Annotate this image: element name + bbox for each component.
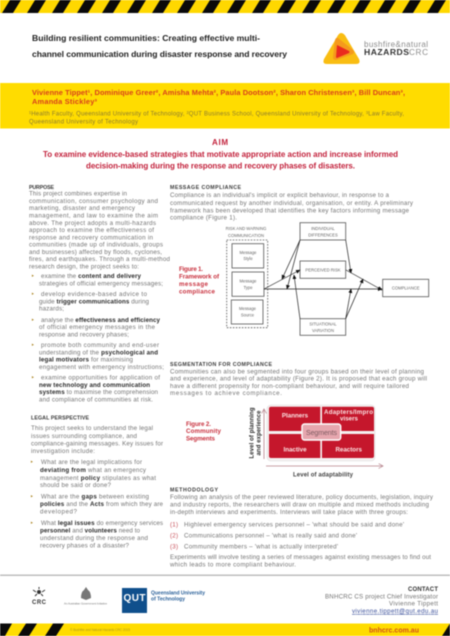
segmentation text: Communities can also be segmented into four groups based on their level of planning xyxy=(170,368,425,376)
purpose body text: approach to examine the effectiveness of xyxy=(29,227,154,234)
purpose body text: above. The project adopts a multi-hazards xyxy=(29,220,156,227)
aim: To examine evidence-based strategies that motivate appropriate action and increase informed xyxy=(43,150,398,159)
segment: inactive: Inactive xyxy=(283,446,307,454)
purpose bullet list xyxy=(31,273,164,404)
figure 1 caption: message xyxy=(179,281,209,288)
purpose bullet list: ‣ xyxy=(31,318,35,324)
vertical axis arrow xyxy=(263,409,265,459)
numbered groups: Communications personnel – 'what is really said and done' xyxy=(184,532,357,540)
copyright note: © Bushfire and Natural Hazards CRC 2015 xyxy=(70,628,130,632)
methodology text: Following an analysis of the peer reviewed literature, policy documents, legislation, inquiry xyxy=(170,494,434,501)
legal bullet list: understand during the response and xyxy=(40,535,149,542)
title: channel communication during disaster response and recovery xyxy=(32,49,287,59)
website: bnhcrc.com.au xyxy=(369,628,419,634)
segmentation text: have a different propensity for non-compliant behaviour, and will require tailored xyxy=(170,383,410,390)
aim xyxy=(43,138,398,170)
purpose bullet list: examine the content and delivery xyxy=(41,273,142,280)
heading: message compliance: MESSAGE COMPLIANCE xyxy=(170,185,241,191)
legal body text: investigation include: xyxy=(31,448,95,455)
author band: Amanda Stickley³ xyxy=(32,97,98,106)
risk and warning communication group: Message xyxy=(240,278,257,284)
segmentation text xyxy=(170,368,427,397)
logo: QUT xyxy=(122,588,205,613)
legal bullet list: ‣ xyxy=(30,460,34,466)
message compliance text: Compliance is an individual's implicit or explicit behaviour, in response to a xyxy=(170,192,390,199)
logo: Bushfire and Natural Hazards CRC xyxy=(323,33,428,64)
legal body text: This project seeks to understand the legal xyxy=(31,425,153,432)
logo: Bushfire and Natural Hazards CRC: bushfire&natural xyxy=(364,40,428,49)
purpose bullet list: ‣ xyxy=(31,376,35,382)
aim: decision-making during the response and recovery phases of disasters. xyxy=(86,162,355,170)
numbered groups: Highlevel emergency services personnel – 'what should be said and done' xyxy=(184,521,404,528)
figure 1 caption: Framework of xyxy=(179,274,220,280)
numbered groups: (2) xyxy=(170,532,178,540)
risk and warning communication group xyxy=(226,226,268,328)
purpose body text: management, and law to examine the aim xyxy=(29,212,158,220)
heading: methodology: METHODOLOGY xyxy=(170,488,218,494)
aim: AIM xyxy=(212,138,228,147)
logo: QUT: QUT xyxy=(124,593,146,604)
legal body text xyxy=(31,425,163,455)
heading: purpose: PURPOSE xyxy=(29,185,54,191)
compliance box: COMPLIANCE xyxy=(392,286,420,290)
purpose bullet list: guide trigger communications during xyxy=(39,298,150,306)
logo: Australian Government crest: An Australian Government Initiative xyxy=(64,602,107,606)
contact block: vivienne.tippett@qut.edu.au xyxy=(352,608,439,615)
figure 1 caption: Figure 1. xyxy=(179,266,203,273)
individual differences box xyxy=(300,223,346,240)
legal bullet list xyxy=(30,459,164,550)
legal bullet list: policies and the Acts from which they are xyxy=(40,501,164,508)
purpose bullet list: develop evidence-based advice to xyxy=(41,291,148,298)
arrows xyxy=(264,240,382,319)
footer divider xyxy=(0,574,450,576)
purpose body text: communication, consumer psychology and xyxy=(29,198,159,205)
panel: purpose xyxy=(29,185,171,404)
panel: segmentation for compliance xyxy=(170,362,427,397)
situational variation box xyxy=(300,319,346,335)
purpose body text: response and recovery communication in xyxy=(29,234,154,241)
logo: QUT: Queensland University xyxy=(151,590,205,596)
purpose bullet list: ‣ xyxy=(31,292,35,298)
legal bullet list: recovery phases of a disaster? xyxy=(40,542,130,550)
panel: message compliance xyxy=(170,185,414,222)
heading: legal perspective: LEGAL PERSPECTIVE xyxy=(31,416,89,422)
purpose bullet list: strategies of official emergency messages; xyxy=(39,280,163,287)
affiliations: ¹Health Faculty, Queensland University of Technology, ²QUT Business School, Queensland University of Technology, ³Law Faculty, xyxy=(29,112,404,118)
purpose bullet list: analyse the effectiveness and efficiency xyxy=(41,317,161,324)
purpose bullet list: ‣ xyxy=(31,274,35,280)
top hazard stripe xyxy=(0,0,450,13)
legal bullet list: developed? xyxy=(40,508,78,516)
perceived risk box: PERCEIVED RISK xyxy=(305,268,341,272)
experiments text: Experiments will involve testing a series of messages against existing messages to find out xyxy=(170,554,431,561)
purpose body text: fires, and earthquakes. Through a multi-method xyxy=(29,256,171,263)
risk and warning communication group: Type xyxy=(243,285,253,290)
vertical axis label xyxy=(250,407,262,458)
bottom hazard band xyxy=(0,624,450,636)
figure 2 caption: Figure 2. xyxy=(186,421,211,428)
message compliance text xyxy=(170,192,414,222)
title xyxy=(32,33,287,59)
panel: legal perspective xyxy=(30,416,164,550)
perceived risk box xyxy=(300,261,346,278)
legal bullet list: should be said or done? xyxy=(40,482,112,489)
risk and warning communication group: Message xyxy=(239,306,257,311)
methodology text: and industry reports, the researchers will draw on multiple and mixed methods including xyxy=(170,501,430,508)
panel: methodology xyxy=(169,488,434,568)
logo: Australian Government crest xyxy=(64,587,107,606)
segments centre label: Segments xyxy=(306,430,338,437)
legal bullet list: management policy stipulates as what xyxy=(40,475,156,482)
methodology text: in-depth interviews and experiments. Interviews will take place with three groups: xyxy=(170,509,408,516)
purpose bullet list: ‣ xyxy=(31,343,35,349)
figure 1 flow diagram xyxy=(226,223,429,335)
purpose bullet list: engagement with emergency instructions; xyxy=(39,364,164,371)
segment: planners: Planners xyxy=(282,412,309,420)
experiments text xyxy=(169,554,431,568)
message compliance text: compliance (Figure 1). xyxy=(170,214,237,222)
title: Building resilient communities: Creating effective multi- xyxy=(32,33,260,43)
purpose bullet list: legal motivators for maximising xyxy=(39,357,134,364)
legal body text: issues surrounding compliance, and xyxy=(31,433,138,440)
purpose body text: marketing, disaster and emergency xyxy=(29,205,136,212)
legal bullet list: deviating from what an emergency xyxy=(40,467,147,474)
logo: CRC programme xyxy=(32,587,47,606)
legal bullet list: What are the gaps between existing xyxy=(41,494,150,500)
numbered groups: (3) xyxy=(170,544,178,550)
segmentation text: and experience, and level of adaptability (Figure 2). It is proposed that each group will xyxy=(170,376,427,383)
logo: Bushfire and Natural Hazards CRC: CRC xyxy=(409,48,428,57)
segment: adapters/improvisers: Adapters/Impro xyxy=(324,409,373,416)
legal bullet list: ‣ xyxy=(30,494,34,500)
purpose body text: This project combines expertise in xyxy=(29,190,128,198)
purpose bullet list: promote both community and end-user xyxy=(41,342,159,349)
legal bullet list: ‣ xyxy=(30,521,34,527)
purpose bullet list: response and recovery phases; xyxy=(39,332,129,338)
purpose body text: communities (made up of individuals, groups xyxy=(29,242,163,249)
risk and warning communication group: COMMUNICATION xyxy=(228,233,264,238)
purpose bullet list: and compliance of communities at risk. xyxy=(39,396,153,404)
purpose bullet list: of official emergency messages in the xyxy=(39,324,156,331)
purpose body text xyxy=(29,190,171,270)
heading: segmentation: SEGMENTATION FOR COMPLIANCE xyxy=(170,362,272,368)
risk and warning communication group: Message xyxy=(240,250,257,255)
numbered groups: Community members – 'what is actually interpreted' xyxy=(184,544,338,550)
horizontal axis arrow xyxy=(266,465,383,467)
situational variation box: VARIATION xyxy=(312,328,334,333)
author band: Queensland University of Technology xyxy=(29,120,138,126)
contact block: Vivienne Tippett xyxy=(389,600,438,608)
individual differences box: INDIVIDUAL xyxy=(311,226,335,231)
purpose bullet list: new technology and communication xyxy=(39,382,150,389)
purpose bullet list: understanding of the psychological and xyxy=(39,350,158,356)
numbered groups: (1) xyxy=(170,521,178,528)
horizontal axis label: Level of adaptability xyxy=(293,472,354,478)
figure 2 caption xyxy=(186,421,222,442)
segment: adapters/improvisers xyxy=(322,407,374,431)
purpose bullet list: hazards; xyxy=(39,306,64,313)
message compliance text: communicated request by another individual, organisation, or entity. A preliminary xyxy=(170,200,414,207)
authors: Vivienne Tippet¹, Dominique Greer², Amisha Mehta², Paula Dootson², Sharon Christensen³, Bill Duncan³, xyxy=(32,88,405,97)
purpose body text: and businesses) affected by floods, cyclones, xyxy=(29,249,162,256)
experiments text: which leads to more compliant behaviour. xyxy=(169,561,296,568)
logo: QUT: of Technology xyxy=(151,596,185,602)
figure 2 community segments matrix xyxy=(250,405,383,478)
numbered groups xyxy=(170,521,404,550)
segmentation text: messages to achieve compliance. xyxy=(170,390,282,397)
purpose bullet list: examine opportunities for application of xyxy=(41,374,160,382)
purpose body text: research design, the project seeks to: xyxy=(29,264,139,270)
figure 2 caption: Segments xyxy=(186,436,216,442)
purpose bullet list: systems to maximise the comprehension xyxy=(39,389,159,396)
figure 2 caption: Community xyxy=(186,428,222,435)
figure 1 caption: compliance xyxy=(179,288,216,295)
author band xyxy=(0,83,450,128)
logo: Bushfire and Natural Hazards CRC: HAZARDS xyxy=(364,47,409,57)
segment: adapters/improvisers: visers xyxy=(340,416,358,422)
segment: reactors: Reactors xyxy=(335,446,362,454)
contact block xyxy=(325,587,439,615)
legal bullet list: personnel and volunteers need to xyxy=(40,528,141,534)
situational variation box: SITUATIONAL xyxy=(309,322,337,327)
risk and warning communication group: Style xyxy=(243,256,253,261)
compliance box xyxy=(383,279,429,297)
risk and warning communication group: Source xyxy=(241,312,255,318)
contact block: BNHCRC CS project Chief Investigator xyxy=(325,593,438,600)
message compliance text: framework has been developed that identifies the key factors informing message xyxy=(170,208,410,214)
contact block: CONTACT xyxy=(408,587,438,593)
legal body text: compliance-gaining messages. Key issues for xyxy=(31,440,163,448)
vertical axis label: and experience xyxy=(256,410,262,456)
logo: CRC programme: CRC xyxy=(32,600,47,606)
risk and warning communication group: RISK AND WARNING xyxy=(226,226,266,231)
individual differences box: DIFFERENCES xyxy=(308,232,338,238)
methodology text xyxy=(170,494,434,516)
figure 1 caption xyxy=(179,266,220,295)
legal bullet list: What are the legal implications for xyxy=(41,459,142,466)
legal bullet list: What legal issues do emergency services xyxy=(41,520,163,527)
vertical axis label: Level of planning xyxy=(250,407,256,458)
